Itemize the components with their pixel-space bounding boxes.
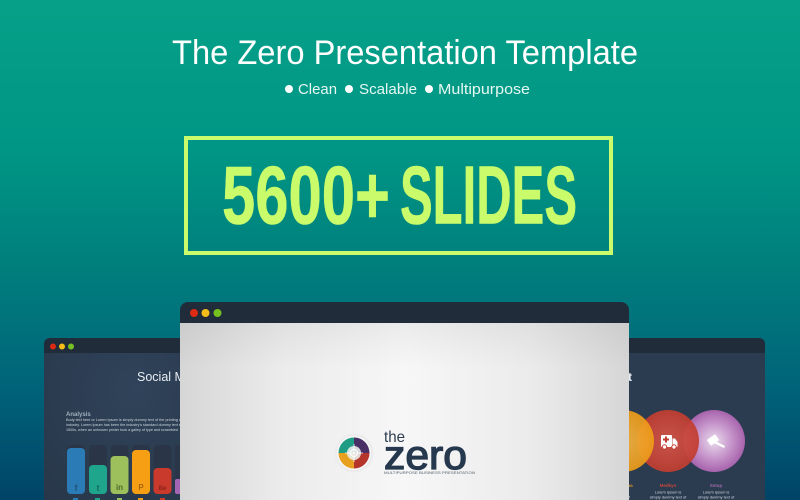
- bar chart: [67, 445, 181, 500]
- bar chart: t: [96, 483, 100, 493]
- body text: 1500s, when an unknown printer took a galley of type and scrambled: [66, 428, 178, 432]
- circle captions: [614, 483, 735, 500]
- bar chart: Be: [159, 486, 167, 492]
- slide count box: [186, 138, 611, 253]
- circle captions: ny text of: [614, 494, 631, 500]
- circle captions: ba: [627, 483, 633, 488]
- bar chart: in: [116, 483, 123, 492]
- left browser panel: social media: [44, 338, 194, 500]
- orange circle: [592, 410, 654, 472]
- logo text: zero: zero: [384, 432, 467, 478]
- panel heading fragment: t: [628, 370, 632, 384]
- feature list: Clean: [298, 81, 337, 98]
- circle captions: simply dummy text of: [650, 494, 687, 500]
- center browser window: [180, 302, 629, 500]
- circle captions: Lorem Ipsum is: [655, 490, 681, 494]
- body text: Body text here or Lorem Ipsum is simply dummy text of the printing a: [66, 418, 182, 422]
- logo tagline: MULTIPURPOSE BUSINESS PRESENTATION: [384, 470, 475, 475]
- logo: the zero: [334, 429, 475, 478]
- circle captions: Medkyn: [660, 483, 677, 488]
- circle captions: Setup: [710, 483, 722, 488]
- bar chart: f: [74, 483, 78, 493]
- logo emblem: [334, 434, 374, 472]
- body text: Analysis: [66, 412, 91, 418]
- circle captions: simply dummy text of: [698, 494, 735, 500]
- feature list: Multipurpose: [438, 81, 530, 98]
- slide count: SLIDES: [400, 148, 577, 242]
- logo text: the: the: [384, 429, 405, 446]
- purple circle: [683, 410, 745, 472]
- title: The Zero Presentation Template: [172, 34, 638, 72]
- slide count: [222, 148, 577, 242]
- slide count: 5600+: [222, 148, 390, 242]
- circle captions: sum is: [616, 490, 628, 494]
- bar chart: P: [138, 483, 144, 492]
- body text: [66, 412, 182, 432]
- body text: industry. Lorem Ipsum has been the industry's standard dummy text e: [66, 423, 181, 427]
- feature list: [285, 81, 530, 98]
- icon: ambulance: [661, 435, 678, 449]
- icon: gavel: [707, 434, 725, 448]
- red circle: [637, 410, 699, 472]
- circle captions: Lorem Ipsum is: [703, 490, 729, 494]
- right browser panel: circles: [592, 338, 765, 500]
- feature list: Scalable: [359, 81, 417, 98]
- panel heading: Social Me: [137, 370, 192, 384]
